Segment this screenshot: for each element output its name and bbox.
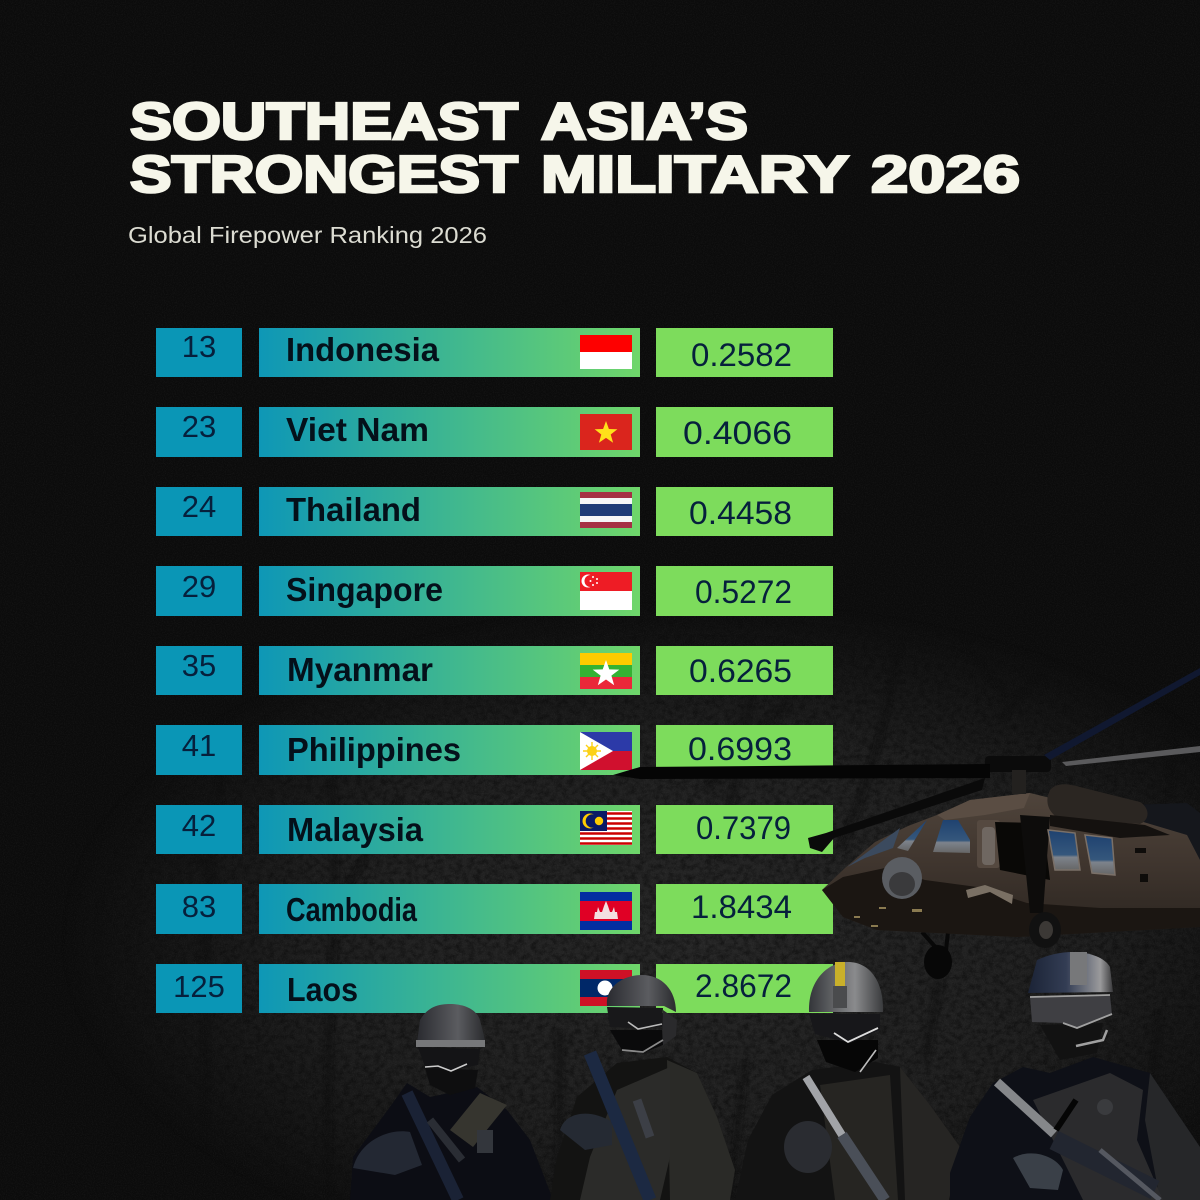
row: Thailand: 24	[182, 489, 216, 524]
ranking table	[156, 328, 833, 1013]
soldier 2	[550, 975, 735, 1200]
row: Thailand: Thailand	[286, 491, 421, 528]
rifle	[997, 1082, 1160, 1200]
row: Malaysia: 0.7379	[696, 810, 791, 846]
helmet marker	[835, 962, 845, 986]
flag: Singapore	[580, 572, 632, 610]
row: Cambodia: 83	[182, 889, 216, 924]
flag: Philippines	[580, 732, 632, 770]
row: Cambodia	[156, 884, 833, 934]
row: Viet Nam: Viet Nam	[286, 411, 429, 448]
title	[130, 93, 1020, 204]
rotor blade: lower front	[808, 778, 985, 852]
row: Viet Nam: 23	[182, 409, 216, 444]
door	[977, 820, 1000, 868]
row: Viet Nam	[156, 407, 833, 457]
nose gear	[922, 932, 952, 979]
tail section	[1130, 803, 1200, 900]
cabin opening	[995, 822, 1050, 880]
helicopter	[613, 668, 1200, 979]
soldier 3	[735, 962, 960, 1200]
rotor blade: right	[1062, 746, 1200, 766]
rotor hub	[985, 756, 1051, 794]
rotor blade: left	[613, 764, 990, 779]
windshield	[847, 820, 927, 867]
sensor pod	[882, 857, 922, 899]
row: Laos	[156, 964, 833, 1013]
row: Laos: 125	[173, 969, 225, 1004]
row: Malaysia	[156, 805, 833, 854]
row: Singapore	[156, 566, 833, 616]
row: Malaysia: Malaysia	[287, 811, 424, 848]
row: Indonesia	[156, 328, 833, 377]
row: Singapore: Singapore	[286, 571, 443, 608]
flag: Thailand	[580, 492, 632, 528]
fuselage	[822, 793, 1200, 937]
title: STRONGEST	[130, 146, 518, 204]
belly	[822, 868, 1200, 937]
title: 2026	[871, 146, 1020, 204]
row: Myanmar: 35	[182, 648, 216, 683]
row: Philippines: Philippines	[287, 731, 461, 768]
title: MILITARY	[541, 146, 849, 204]
flag: Malaysia	[580, 811, 632, 845]
roof highlight	[937, 793, 1030, 820]
row: Philippines: 0.6993	[688, 731, 792, 767]
row: Indonesia: Indonesia	[286, 331, 440, 368]
flag: Viet Nam	[580, 414, 632, 450]
subtitle: Global Firepower Ranking 2026	[128, 222, 487, 248]
row: Indonesia: 13	[182, 329, 216, 364]
row: Laos: Laos	[287, 971, 358, 1008]
flag: Cambodia	[580, 892, 632, 930]
row: Singapore: 0.5272	[695, 574, 792, 610]
flag: Myanmar	[580, 653, 632, 689]
main wheel	[1029, 912, 1061, 948]
flag: Laos	[580, 970, 632, 1006]
row: Philippines: 41	[182, 728, 216, 763]
step	[966, 885, 1013, 904]
row: Laos: 2.8672	[695, 968, 792, 1004]
row: Cambodia: 1.8434	[691, 889, 792, 925]
cabin windows	[1048, 830, 1115, 875]
row: Malaysia: 42	[182, 808, 216, 843]
engine housing	[1047, 784, 1148, 824]
rotor blade: upper right	[1044, 668, 1200, 760]
soldier 1	[350, 1004, 553, 1200]
row: Cambodia: Cambodia	[286, 891, 418, 928]
row: Thailand: 0.4458	[689, 495, 792, 531]
row: Viet Nam: 0.4066	[683, 415, 792, 451]
row: Philippines	[156, 725, 833, 775]
row: Thailand	[156, 487, 833, 536]
soldier 4	[950, 952, 1200, 1200]
cockpit window	[933, 820, 970, 853]
row: Indonesia: 0.2582	[691, 337, 792, 373]
main gear strut	[1020, 815, 1050, 913]
row: Myanmar: Myanmar	[287, 651, 433, 688]
row: Myanmar: 0.6265	[689, 653, 792, 689]
row: Myanmar	[156, 646, 833, 695]
hull hatches	[1135, 848, 1148, 882]
title: SOUTHEAST	[130, 93, 518, 151]
row: Singapore: 29	[182, 569, 216, 604]
title: ASIA’S	[541, 93, 748, 151]
flag: Indonesia	[580, 335, 632, 369]
belly lights	[854, 907, 922, 927]
